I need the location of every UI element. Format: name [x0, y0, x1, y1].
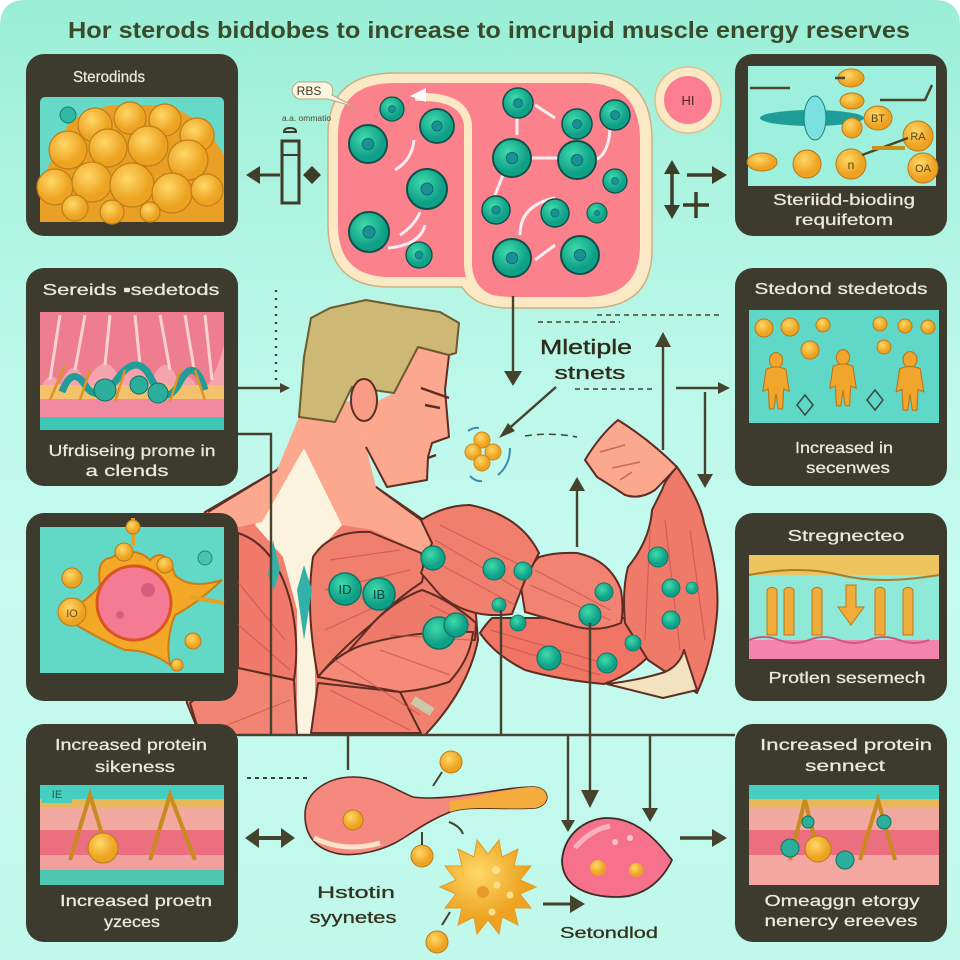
biceps: [521, 553, 622, 629]
panel: binding receptor: OA: [915, 163, 932, 175]
panel: increased protein right: Omeaggn etorgy: [764, 893, 920, 910]
panel: increased protein left: yzeces: [104, 914, 160, 931]
panel: increased protein left: sikeness: [95, 759, 175, 776]
panel: binding receptor: BT: [871, 113, 885, 125]
label: multiple sinets: stnets: [554, 363, 626, 383]
panel: strengthened: Stregnecteo: [788, 528, 905, 545]
muscle fibres: [210, 520, 705, 730]
fist: [585, 420, 677, 497]
muscular torso and arm: IB: [373, 587, 385, 602]
muscular torso and arm: ID: [338, 582, 352, 597]
panel: binding receptor: requifetom: [795, 212, 893, 229]
panel: cell signalling: [26, 513, 238, 701]
panel: cell signalling: IO: [66, 608, 78, 620]
cream centre tendon: [255, 448, 342, 735]
flow arrows: [238, 290, 735, 904]
muscle cell diagram: [328, 73, 652, 308]
pink organelle: [562, 818, 672, 897]
arrow: left connector: a.a. ommatio: [282, 113, 331, 123]
panel: steroids sedetods: Sereids ▪sedetods: [42, 282, 220, 299]
panel: increased protein right: nenercy ereeves: [764, 913, 918, 930]
panel: increased protein left: Increased protein: [55, 737, 207, 754]
forearm: [624, 467, 718, 693]
torso base: [180, 440, 478, 735]
panel: binding receptor: n: [848, 158, 854, 172]
panel: steroids sedetods: [26, 268, 238, 486]
callout: RBS label: RBS: [297, 84, 321, 98]
label: histotin synthetes: [310, 883, 396, 927]
neck skin: [208, 400, 432, 553]
label: multiple sinets: [540, 337, 632, 383]
label: histotin synthetes: syynetes: [310, 908, 396, 927]
syringe: [413, 700, 432, 712]
title: Hor sterods biddobes to increase to imcrupid muscle energy reserves: [68, 17, 910, 43]
molecules near cell: [411, 751, 463, 953]
panel: binding receptor: [735, 54, 947, 236]
teal dots: [329, 546, 698, 673]
arrow: top right connector: [664, 160, 727, 219]
chest muscle blocks: [310, 532, 423, 677]
panel: binding receptor: RA: [910, 131, 926, 143]
panel: increased protein right: [735, 724, 947, 942]
panel: increased protein right: Increased protein: [760, 737, 932, 754]
panel: steroid deposits: Sterodinds: [73, 69, 145, 86]
panel: strengthened: Protlen sesemech: [768, 670, 926, 687]
brow and eye: [421, 388, 449, 458]
lower arm muscle: [480, 618, 648, 684]
panel: increased in reserves: Increased in: [795, 440, 893, 457]
label: setondiod: Setondlod: [560, 925, 658, 942]
panel: increased in reserves: Stedond stedetods: [754, 281, 928, 298]
arrow heads: [280, 332, 730, 913]
panel: increased protein left: Increased proetn: [60, 893, 212, 910]
panel: increased in reserves: secenwes: [806, 460, 890, 477]
elongated muscle cell: [305, 777, 547, 855]
panel: steroids sedetods: Ufrdiseing prome in: [48, 443, 216, 460]
head skin: [299, 347, 449, 487]
spiky cell: [440, 840, 536, 934]
callout: RBS label: [292, 82, 355, 107]
central molecule: [465, 428, 577, 481]
ear: [351, 379, 377, 421]
hair: [299, 300, 459, 422]
arrow: left connector: [246, 113, 331, 203]
panel: steroids sedetods: a clends: [86, 463, 168, 480]
hormone badge: [655, 67, 721, 133]
panel: increased protein left: IE: [52, 789, 62, 801]
panel: steroid deposits: [26, 54, 238, 236]
teal clusters: [268, 540, 312, 640]
label: histotin synthetes: Hstotin: [317, 883, 395, 902]
deltoid: [421, 505, 539, 615]
panel: increased protein left: [26, 724, 238, 942]
back muscle: [238, 533, 296, 680]
label: multiple sinets: Mletiple: [540, 337, 632, 359]
hormone badge: HI: [682, 93, 694, 108]
panel: strengthened: [735, 513, 947, 701]
arrow: left double: [245, 828, 295, 848]
panel: increased in reserves: [735, 268, 947, 486]
panel: increased protein right: sennect: [805, 758, 886, 775]
muscular torso and arm: [180, 300, 718, 735]
panel: binding receptor: Steriidd-bioding: [773, 192, 915, 209]
